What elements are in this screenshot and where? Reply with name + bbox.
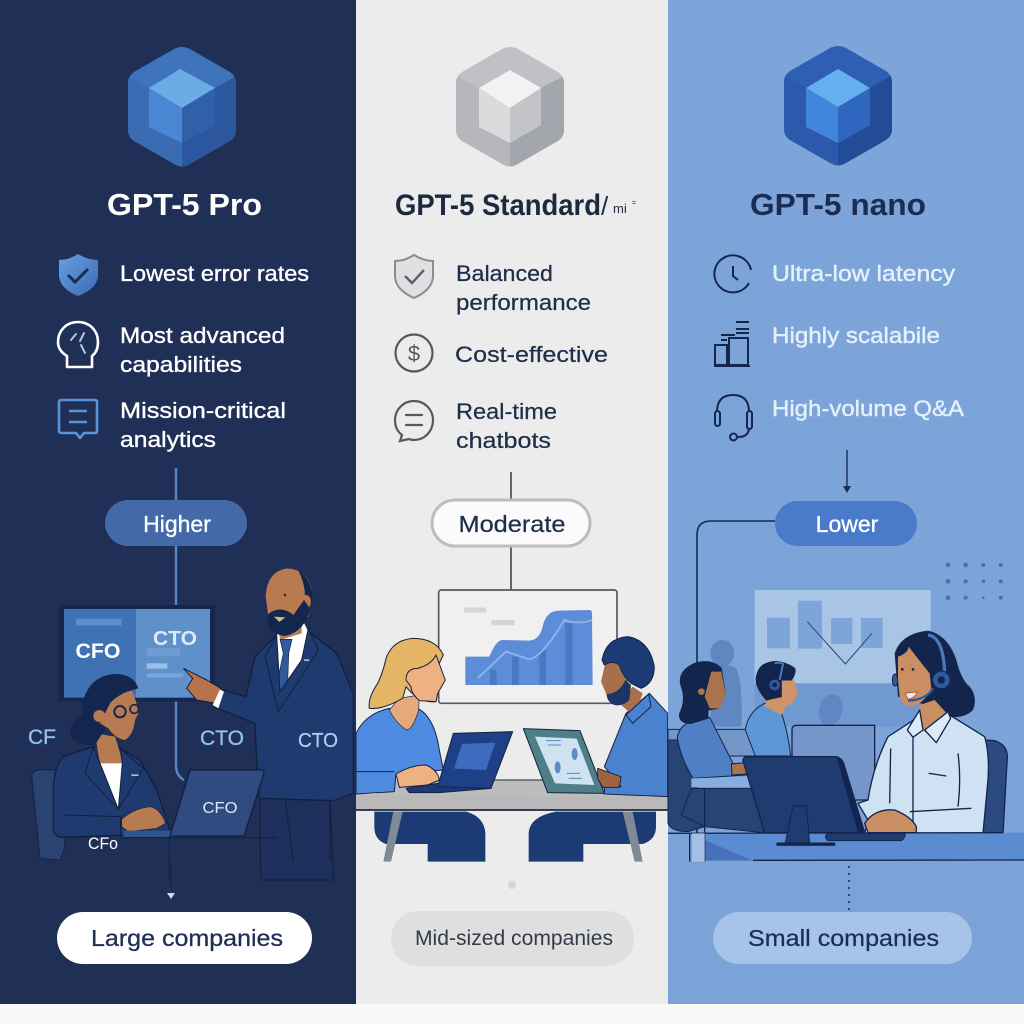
title: GPT-5 Standard/mi: =	[632, 200, 636, 207]
floating labels: CFO	[76, 640, 120, 663]
feature: real-time chatbots: chatbots	[456, 428, 551, 453]
pill: Lower	[775, 501, 917, 546]
pill: Mid-sized companies: Mid-sized companies	[415, 927, 613, 950]
feature: high-volume Q&A	[715, 395, 964, 440]
icon: dollar coin	[396, 334, 432, 372]
title: GPT-5 Standard/mi: /	[601, 191, 609, 221]
floating labels: CTO	[153, 628, 197, 650]
connector line	[510, 472, 512, 590]
blonde woman	[356, 638, 445, 794]
laptop: teal	[523, 729, 604, 793]
icon: chat bubble	[395, 401, 433, 441]
feature: cost-effective: Cost-effective	[455, 342, 608, 367]
desk and foreground monitor	[668, 757, 1024, 862]
pill: Higher: Higher	[143, 511, 211, 537]
wall chart	[755, 590, 931, 727]
feature: ultra-low latency	[714, 255, 955, 292]
illustration: support team	[668, 563, 1024, 862]
presentation screen	[58, 605, 215, 702]
floating labels: CTO	[298, 730, 338, 752]
icon: bright blue cube	[784, 46, 892, 166]
pill: Mid-sized companies	[391, 911, 634, 966]
panel: GPT-5 Pro	[0, 0, 356, 1004]
icon: clock	[714, 255, 751, 292]
feature: ultra-low latency: Ultra-low latency	[772, 261, 955, 286]
background silhouettes	[708, 640, 846, 728]
feature: lowest error rates: Lowest error rates	[120, 261, 309, 286]
dotted connector	[848, 866, 850, 910]
floating labels: CFo	[88, 834, 118, 853]
feature: cost-effective	[396, 334, 608, 372]
pill: Large companies: Large companies	[91, 925, 283, 951]
panel: GPT-5 nano	[668, 0, 1024, 1004]
pill: Small companies: Small companies	[748, 925, 939, 951]
feature: highly scalabile: Highly scalabile	[772, 323, 940, 348]
feature: advanced capabilities: Most advanced	[120, 323, 285, 348]
pill: Moderate: Moderate	[458, 511, 566, 537]
title: GPT-5 nano: GPT-5 nano	[750, 187, 926, 222]
illustration: boardroom	[28, 568, 353, 880]
connector line	[176, 468, 184, 780]
standing man executive	[183, 568, 353, 880]
icon: blue cube	[128, 47, 236, 166]
laptop: dark blue	[406, 732, 513, 793]
decorative dot	[508, 881, 516, 889]
title: GPT-5 Pro: GPT-5 Pro	[107, 187, 262, 222]
pill: Higher	[105, 500, 247, 546]
meeting table and legs	[356, 780, 668, 862]
pill: Large companies	[57, 912, 312, 964]
floating labels: CF	[28, 726, 56, 749]
small arrow	[167, 862, 175, 899]
pill: Lower: Lower	[816, 511, 879, 537]
decorative dot grid	[946, 563, 1003, 600]
feature: highly scalabile	[714, 322, 940, 366]
icon: shield	[59, 254, 98, 296]
main agent with headset	[858, 631, 1007, 833]
pill: Small companies	[713, 912, 972, 964]
illustration: team meeting	[356, 590, 668, 862]
laptop	[120, 770, 277, 880]
title: GPT-5 Standard/mi: GPT-5 Standard	[395, 189, 601, 222]
feature: mission-critical analytics	[59, 398, 286, 452]
panel: GPT-5 Standard	[356, 0, 668, 1004]
icon: dollar coin: $	[408, 341, 420, 366]
feature: advanced capabilities: capabilities	[120, 352, 242, 377]
seated agent: left	[668, 662, 763, 833]
feature: real-time chatbots	[395, 399, 557, 453]
feature: balanced performance	[395, 255, 591, 315]
presentation board	[439, 590, 617, 703]
pill: Moderate	[432, 500, 590, 546]
feature: real-time chatbots: Real-time	[456, 399, 557, 424]
title: GPT-5 Standard/mi: mi	[613, 201, 627, 216]
seated agent: middle	[745, 662, 798, 756]
feature: mission-critical analytics: Mission-critical	[120, 398, 286, 423]
feature: mission-critical analytics: analytics	[120, 427, 216, 452]
feature: balanced performance: Balanced	[456, 261, 553, 286]
arrow down	[843, 450, 851, 493]
floating labels: CFO	[202, 800, 238, 817]
feature: balanced performance: performance	[456, 290, 591, 315]
monitor behind	[668, 725, 875, 800]
feature: high-volume Q&A: High-volume Q&A	[772, 396, 964, 421]
icon: bar stack	[714, 322, 750, 366]
icon: chat panel	[59, 400, 97, 438]
woman executive	[32, 674, 170, 860]
feature: lowest error rates	[59, 254, 309, 296]
icon: brain head	[58, 322, 98, 367]
icon: grey shield	[395, 255, 433, 298]
floating labels: CTO	[200, 727, 244, 750]
elbow connector	[697, 521, 775, 860]
floating labels	[28, 628, 338, 853]
feature: advanced capabilities	[58, 322, 285, 377]
icon: grey cube	[456, 47, 564, 166]
icon: headset	[715, 395, 752, 440]
bottom strip	[0, 1004, 1024, 1024]
turbaned man	[598, 637, 668, 797]
